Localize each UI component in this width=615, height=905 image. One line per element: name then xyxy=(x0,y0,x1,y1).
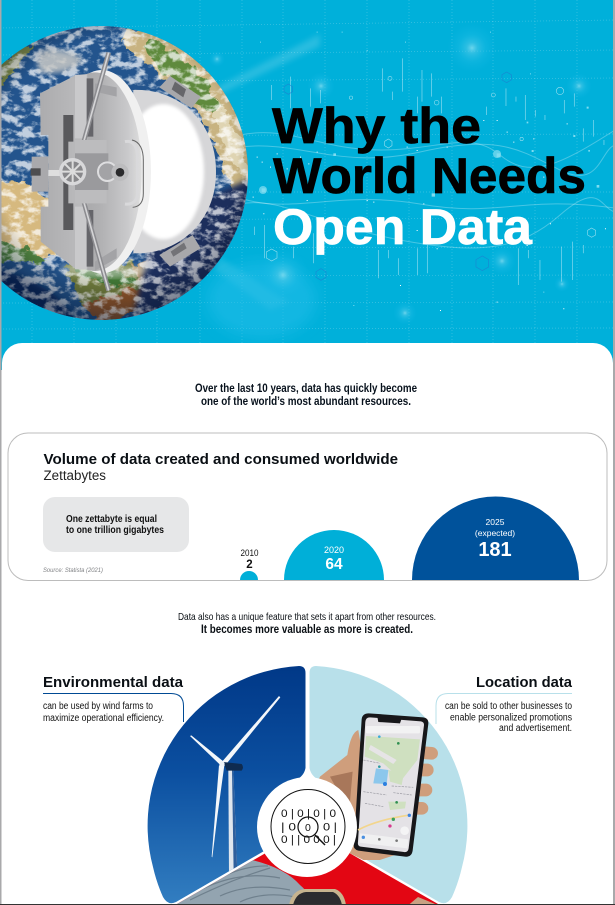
phone xyxy=(354,713,428,857)
note: zettabyte definition: One zettabyte is equal xyxy=(66,514,157,525)
panel: volume of data chart xyxy=(8,433,607,580)
note: zettabyte definition xyxy=(43,497,189,552)
icon: binary magnifier: 0 | | 0 0 0 | xyxy=(281,834,336,846)
hand xyxy=(310,730,420,860)
icon: binary magnifier: 0 xyxy=(305,822,311,834)
callout: environmental data: maximize operational efficiency. xyxy=(43,713,164,724)
icon: binary magnifier: 0 | xyxy=(323,822,337,834)
bubble: 2020 xyxy=(284,530,384,580)
chart heading: Volume of data created and consumed worldwide xyxy=(44,451,398,468)
bolt rods xyxy=(80,53,109,291)
callout: environmental data: Environmental data xyxy=(43,674,184,691)
sector: location data, phone with map xyxy=(310,666,467,903)
callout: location data: Location data xyxy=(476,674,573,691)
globe xyxy=(2,26,248,320)
icon: binary magnifier: 0 | 0 | 0 | 0 xyxy=(281,808,336,820)
intro text: Over the last 10 years, data has quickly become xyxy=(195,383,417,395)
illustration: earth with vault door xyxy=(2,26,248,320)
bubble: 2025 expected: (expected) xyxy=(475,528,515,538)
bubble: 2025 expected xyxy=(412,496,579,580)
callout: environmental data xyxy=(43,674,184,724)
icon: binary magnifier: | 0 xyxy=(281,822,296,834)
callout: location data: can be sold to other businesses to xyxy=(445,701,572,712)
door handle xyxy=(125,141,137,204)
callout: location data: enable personalized promotions xyxy=(450,712,572,724)
door frame and light xyxy=(133,90,216,253)
bubble: 2025 expected: 181 xyxy=(478,539,512,561)
fan diagram xyxy=(140,660,467,905)
source: Source: Statista (2021) xyxy=(43,567,103,574)
vault door xyxy=(31,53,216,291)
title: World Needs xyxy=(273,148,586,204)
chart unit: Zettabytes xyxy=(44,468,106,483)
sector: wearable data, smartwatch on arm xyxy=(177,853,438,904)
intro text xyxy=(195,383,417,408)
callout: environmental data: can be used by wind farms to xyxy=(43,701,153,712)
note: zettabyte definition: to one trillion gigabytes xyxy=(66,525,164,536)
icon: binary magnifier xyxy=(257,768,357,877)
callout: location data xyxy=(436,674,573,734)
plate xyxy=(40,74,87,269)
title: Why the xyxy=(272,98,481,154)
bubble: 2020: 64 xyxy=(325,556,343,573)
bubble: 2010 xyxy=(240,548,258,580)
sector: environmental data, wind turbine xyxy=(140,660,310,905)
title xyxy=(272,98,586,255)
bubble: 2010: 2010 xyxy=(240,548,258,558)
hub and wheel xyxy=(75,140,107,203)
hinges xyxy=(159,76,201,108)
secondary text xyxy=(178,611,436,636)
door disc xyxy=(52,70,151,273)
header background xyxy=(0,0,615,370)
secondary text: It becomes more valuable as more is created. xyxy=(201,624,413,636)
white content panel xyxy=(2,343,613,905)
intro text: one of the world’s most abundant resources. xyxy=(201,396,411,408)
icon: wind turbine xyxy=(190,696,280,873)
bubble: 2020: 2020 xyxy=(324,545,344,555)
title: Open Data xyxy=(273,199,533,255)
bubble: 2010: 2 xyxy=(246,559,253,571)
bubble: 2025 expected: 2025 xyxy=(486,517,505,527)
secondary text: Data also has a unique feature that sets it apart from other resources. xyxy=(178,611,436,623)
callout: location data: and advertisement. xyxy=(499,723,572,734)
